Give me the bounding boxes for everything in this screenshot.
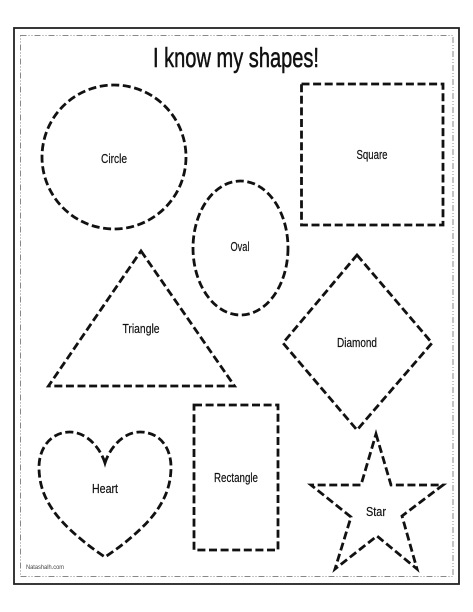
title: I know my shapes! — [153, 42, 319, 73]
shape: star: Star — [366, 504, 387, 519]
shape: oval — [193, 181, 288, 315]
shape: square: Square — [356, 147, 388, 162]
shape: diamond: Diamond — [337, 335, 377, 350]
shape: triangle — [48, 251, 234, 386]
shape: triangle: Triangle — [122, 321, 160, 336]
website credit: Natashalh.com — [26, 564, 64, 571]
shape: rectangle — [194, 405, 278, 550]
shape: diamond — [283, 255, 432, 430]
shape: rectangle: Rectangle — [214, 470, 258, 485]
shape: heart — [39, 432, 171, 557]
shape: oval: Oval — [230, 239, 250, 254]
shape: heart: Heart — [92, 481, 118, 496]
shape: square — [302, 84, 443, 225]
shape: circle — [42, 85, 186, 229]
shape: star — [311, 434, 443, 569]
shape: circle: Circle — [101, 151, 127, 166]
